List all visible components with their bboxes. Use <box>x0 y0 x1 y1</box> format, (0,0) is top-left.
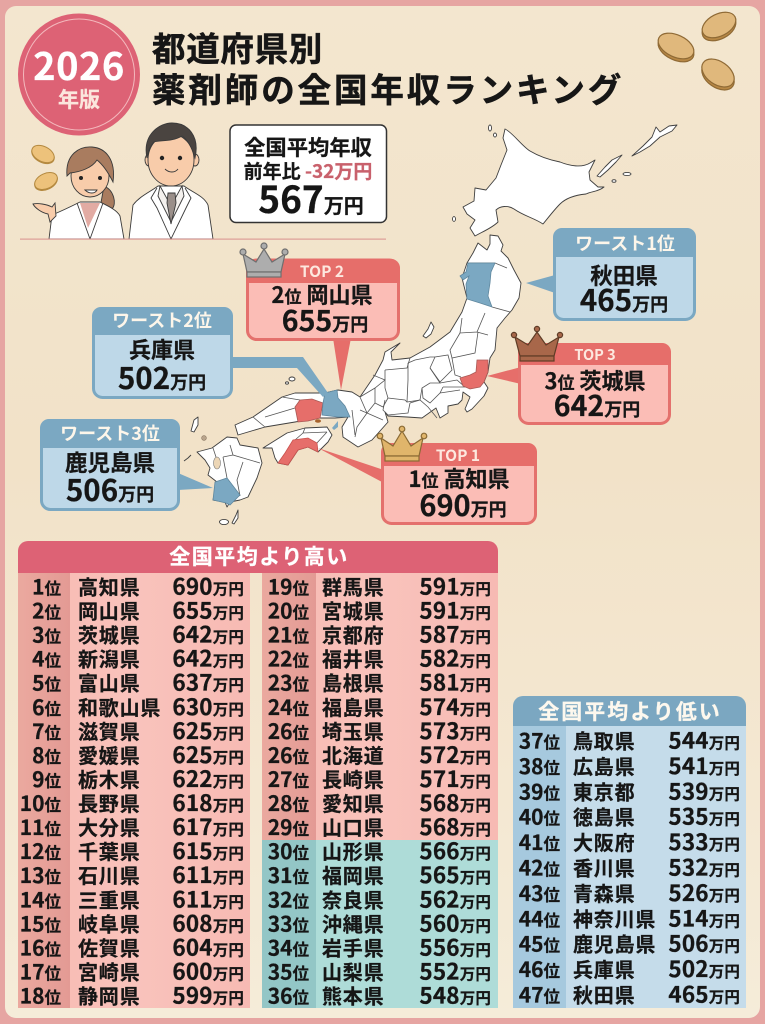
callout: TOP 1 Kochi: 1位 高知県 <box>409 462 509 494</box>
map: Shodoshima <box>315 419 321 423</box>
callout: national average: 前年比 -32万円 <box>244 157 372 184</box>
rows: ranks 1–18: 5位 <box>32 668 62 698</box>
map: Shikoku <box>263 427 332 465</box>
rows: ranks 37–47: 465万円 <box>668 978 740 1010</box>
rows: ranks 1–18: 岡山県 <box>78 596 140 625</box>
rows: ranks 37–47: 41位 <box>519 827 560 857</box>
arrow: pointer to Ibaraki <box>487 367 521 384</box>
rows: ranks 1–18: 17位 <box>20 956 62 986</box>
rows: ranks 1–18: 1位 <box>32 572 62 602</box>
panel: below national average <box>513 696 746 1010</box>
icon: bronze crown <box>511 326 563 361</box>
rows: ranks 19–36: 571万円 <box>419 762 491 794</box>
callout: TOP 1 Kochi <box>318 426 537 525</box>
rows: ranks 1–18: 富山県 <box>78 668 140 697</box>
rows: ranks 19–36: 福島県 <box>322 692 384 721</box>
map: Kochi highlighted <box>278 438 318 465</box>
rows: ranks 37–47: 526万円 <box>668 876 740 908</box>
map of Japan <box>184 125 677 525</box>
rows: ranks 19–36: 島根県 <box>322 668 384 697</box>
rows: ranks 19–36: 北海道 <box>322 740 384 769</box>
rows: ranks 1–18: 茨城県 <box>78 620 140 649</box>
map: Hyogo highlighted <box>322 390 350 417</box>
rows: ranks 37–47: 鹿児島県 <box>573 929 656 958</box>
rows: ranks 19–36: 591万円 <box>419 570 491 602</box>
arrow: pointer to Hyogo <box>231 357 328 397</box>
callout: worst 3 Kagoshima: ワースト3位 <box>60 420 160 446</box>
map: Kagoshima highlighted <box>213 478 240 505</box>
rows: ranks 1–18: 長野県 <box>78 788 140 817</box>
callout: worst 2 Hyogo <box>92 307 328 398</box>
rows: ranks 1–18: 625万円 <box>172 738 244 770</box>
rows: ranks 1–18: 和歌山県 <box>78 692 161 721</box>
rows: ranks 19–36: 山口県 <box>322 812 384 841</box>
badge: 2026年版: 年版 <box>58 84 100 114</box>
callout: TOP 1 Kochi: 690万円 <box>419 483 507 525</box>
rows: ranks 1–18: 12位 <box>20 836 62 866</box>
rows: ranks 37–47: 鳥取県 <box>573 726 635 754</box>
rows: ranks 19–36 <box>268 570 491 1010</box>
rows: ranks 19–36: 565万円 <box>419 858 491 890</box>
rows: ranks 37–47: 東京都 <box>573 776 635 805</box>
callout: worst 1 Akita: ワースト1位 <box>575 230 675 256</box>
rows: ranks 1–18: 6位 <box>32 692 62 722</box>
illustration: female pharmacist <box>33 147 124 239</box>
rows: ranks 19–36: 22位 <box>268 644 310 674</box>
rows: ranks 1–18: 16位 <box>20 932 62 962</box>
rows: ranks 19–36: 埼玉県 <box>322 716 384 745</box>
divider <box>20 239 386 240</box>
rows: ranks 1–18: 岐阜県 <box>78 908 140 937</box>
callout: worst 1 Akita <box>526 228 696 320</box>
rows: ranks 1–18: 608万円 <box>172 906 244 938</box>
rows: ranks 19–36: 山梨県 <box>322 956 384 986</box>
rows: ranks 19–36: 574万円 <box>419 690 491 722</box>
map: Ibaraki highlighted <box>460 360 488 389</box>
rows: ranks 1–18: 大分県 <box>78 812 140 841</box>
callout: worst 2 Hyogo: ワースト2位 <box>112 307 212 333</box>
icon: silver crown <box>240 243 288 277</box>
rows: ranks 19–36: 長崎県 <box>322 764 384 793</box>
rows: ranks 37–47: 兵庫県 <box>573 954 635 983</box>
rows: ranks 1–18: 10位 <box>20 788 62 818</box>
rows: ranks 1–18: 高知県 <box>78 572 140 600</box>
rows: ranks 1–18: 637万円 <box>172 666 244 698</box>
rows: ranks 19–36: 572万円 <box>419 738 491 770</box>
rows: ranks 1–18: 8位 <box>32 740 62 770</box>
rows: ranks 19–36: 552万円 <box>419 954 491 986</box>
title: 都道府県別 <box>152 22 323 71</box>
title: 薬剤師の全国年収ランキング <box>152 63 624 112</box>
rows: ranks 19–36: 19位 <box>268 572 310 602</box>
rows: ranks 19–36: 奈良県 <box>322 884 384 913</box>
rows: ranks 19–36: 573万円 <box>419 714 491 746</box>
rows: ranks 37–47: 539万円 <box>668 774 740 806</box>
rows: ranks 1–18: 630万円 <box>172 690 244 722</box>
rows: ranks 1–18: 611万円 <box>172 882 244 914</box>
rows: ranks 37–47: 40位 <box>519 802 560 832</box>
arrow: pointer to Okayama <box>333 338 351 390</box>
arrow: pointer to Kagoshima <box>178 473 213 490</box>
rows: ranks 37–47 <box>519 724 740 1010</box>
rows: ranks 19–36: 山形県 <box>322 836 384 865</box>
rows: ranks 37–47: 506万円 <box>668 927 740 959</box>
rows: ranks 37–47: 大阪府 <box>573 827 635 856</box>
rows: ranks 37–47: 47位 <box>519 980 560 1010</box>
rows: ranks 19–36: 28位 <box>268 788 310 818</box>
map: Kyushu <box>197 437 262 507</box>
rows: ranks 19–36: 566万円 <box>419 834 491 866</box>
rows: ranks 1–18: 3位 <box>32 620 62 650</box>
heading <box>18 541 498 573</box>
rows: ranks 1–18: 三重県 <box>78 884 140 913</box>
rows: ranks 1–18: 600万円 <box>172 954 244 986</box>
rows: ranks 19–36: 582万円 <box>419 642 491 674</box>
rows: ranks 19–36: 21位 <box>268 620 310 650</box>
rows: ranks 19–36: 560万円 <box>419 906 491 938</box>
rows: ranks 1–18: 15位 <box>20 908 62 938</box>
rows: ranks 1–18: 625万円 <box>172 714 244 746</box>
rows: ranks 19–36: 群馬県 <box>322 572 384 600</box>
rows: ranks 37–47: 43位 <box>519 878 560 908</box>
rows: ranks 1–18: 9位 <box>32 764 62 794</box>
rows: ranks 19–36: 556万円 <box>419 930 491 962</box>
callout: TOP 3 Ibaraki: TOP 3 <box>574 344 616 365</box>
map: Okayama highlighted <box>295 399 323 422</box>
rows: ranks 19–36: 愛知県 <box>322 788 384 817</box>
rows: ranks 19–36: 23位 <box>268 668 310 698</box>
rows: ranks 1–18: 2位 <box>32 596 62 626</box>
badge: 2026年版: 2026 <box>33 36 125 91</box>
callout: worst 3 Kagoshima: 鹿児島県 <box>65 446 155 478</box>
rows: ranks 19–36: 35位 <box>268 956 310 986</box>
rows: ranks 37–47: 神奈川県 <box>573 903 656 932</box>
rows: ranks 19–36: 562万円 <box>419 882 491 914</box>
rows: ranks 19–36: 591万円 <box>419 594 491 626</box>
rows: ranks 1–18: 栃木県 <box>78 764 140 793</box>
rows: ranks 37–47: 544万円 <box>668 724 740 756</box>
rows: ranks 19–36: 29位 <box>268 812 310 842</box>
rows: ranks 37–47: 青森県 <box>573 878 635 907</box>
icon: coins left <box>29 142 60 194</box>
rows: ranks 1–18: 石川県 <box>78 860 140 889</box>
rows: ranks 1–18: 604万円 <box>172 930 244 962</box>
rows: ranks 19–36: 27位 <box>268 764 310 794</box>
rows: ranks 19–36: 宮城県 <box>322 596 384 625</box>
map: prefecture borders <box>213 263 510 496</box>
rows: ranks 37–47: 502万円 <box>668 952 740 984</box>
rows: ranks 19–36: 福井県 <box>322 644 384 673</box>
map: small islands <box>184 322 434 525</box>
rows: ranks 19–36: 568万円 <box>419 810 491 842</box>
rows: ranks 37–47: 秋田県 <box>573 980 635 1008</box>
rows: ranks 19–36: 34位 <box>268 932 310 962</box>
callout: TOP 2 Okayama: TOP 2 <box>300 260 344 282</box>
map: Hokkaido and northern islands <box>452 125 677 236</box>
rows: ranks 1–18: 静岡県 <box>78 980 140 1010</box>
heading: 全国平均より高い <box>169 541 349 571</box>
rows: ranks 37–47: 535万円 <box>668 800 740 832</box>
rows: ranks 19–36: 32位 <box>268 884 310 914</box>
rows: ranks 37–47: 45位 <box>519 929 560 959</box>
callout: worst 3 Kagoshima: 506万円 <box>66 468 154 510</box>
map: Akita highlighted <box>460 263 495 307</box>
callout: worst 1 Akita: 465万円 <box>580 278 668 320</box>
rows: ranks 37–47: 徳島県 <box>573 802 635 831</box>
rows: ranks 37–47: 541万円 <box>668 749 740 781</box>
rows: ranks 37–47: 44位 <box>519 903 560 933</box>
rows: ranks 1–18: 7位 <box>32 716 62 746</box>
callout: TOP 2 Okayama <box>240 243 400 390</box>
arrow: pointer to Akita <box>526 275 555 293</box>
map: Oki island <box>202 436 206 440</box>
rows: ranks 1–18: 佐賀県 <box>78 932 140 961</box>
callout: national average: 567万円 <box>258 170 364 224</box>
rows: ranks 1–18 <box>20 570 244 1010</box>
rows: ranks 37–47: 42位 <box>519 852 560 882</box>
rows: ranks 1–18: 599万円 <box>172 978 244 1010</box>
rows: ranks 19–36: 30位 <box>268 836 310 866</box>
rows: ranks 37–47: 広島県 <box>573 751 635 780</box>
rows: ranks 1–18: 18位 <box>20 980 62 1010</box>
rows: ranks 19–36: 岩手県 <box>322 932 384 961</box>
rows: ranks 1–18: 滋賀県 <box>78 716 140 745</box>
rows: ranks 19–36: 568万円 <box>419 786 491 818</box>
map: Ariake sea <box>214 457 220 469</box>
illustration: male pharmacist <box>129 123 213 239</box>
rows: ranks 37–47: 38位 <box>519 751 560 781</box>
rows: ranks 1–18: 617万円 <box>172 810 244 842</box>
rows: ranks 19–36: 福岡県 <box>322 860 384 889</box>
callout: national average <box>230 125 386 224</box>
rows: ranks 1–18: 11位 <box>20 812 62 842</box>
rows: ranks 19–36: 33位 <box>268 908 310 938</box>
rows: ranks 1–18: 13位 <box>20 860 62 890</box>
rows: ranks 19–36: 26位 <box>268 740 310 770</box>
callout: TOP 3 Ibaraki: 3位 茨城県 <box>545 364 645 396</box>
arrow: pointer to Kochi <box>318 448 384 483</box>
rows: ranks 1–18: 14位 <box>20 884 62 914</box>
rows: ranks 1–18: 新潟県 <box>78 644 140 673</box>
rows: ranks 19–36: 24位 <box>268 692 310 722</box>
callout: TOP 2 Okayama: 655万円 <box>282 299 368 340</box>
rows: ranks 1–18: 655万円 <box>172 594 244 626</box>
table backgrounds <box>18 560 498 1008</box>
map: Awaji highlighted <box>332 421 338 430</box>
rows: ranks 19–36: 581万円 <box>419 666 491 698</box>
callout: national average: 全国平均年収 <box>244 131 372 162</box>
rows: ranks 37–47: 514万円 <box>668 901 740 933</box>
rows: ranks 19–36: 20位 <box>268 596 310 626</box>
rows: ranks 1–18: 622万円 <box>172 762 244 794</box>
rows: ranks 37–47: 533万円 <box>668 825 740 857</box>
rows: ranks 1–18: 611万円 <box>172 858 244 890</box>
rows: ranks 37–47: 37位 <box>519 726 560 756</box>
rows: ranks 19–36: 26位 <box>268 716 310 746</box>
panel: above national average <box>18 541 498 1010</box>
heading: 全国平均より低い <box>538 696 722 726</box>
rows: ranks 37–47: 532万円 <box>668 850 740 882</box>
rows: ranks 1–18: 宮崎県 <box>78 956 140 986</box>
rows: ranks 1–18: 4位 <box>32 644 62 674</box>
rows: ranks 1–18: 642万円 <box>172 642 244 674</box>
callout: worst 3 Kagoshima <box>40 419 213 510</box>
rows: ranks 19–36: 京都府 <box>322 620 384 649</box>
callout: worst 2 Hyogo: 兵庫県 <box>129 333 195 365</box>
rows: ranks 19–36: 587万円 <box>419 618 491 650</box>
rows: ranks 37–47: 39位 <box>519 776 560 806</box>
badge: 2026年版 <box>18 14 140 136</box>
rows: ranks 19–36: 548万円 <box>419 978 491 1010</box>
callout: TOP 3 Ibaraki: 642万円 <box>554 384 640 425</box>
rows: ranks 37–47: 香川県 <box>573 852 635 882</box>
rows: ranks 1–18: 642万円 <box>172 618 244 650</box>
rows: ranks 1–18: 千葉県 <box>78 836 140 865</box>
rows: ranks 19–36: 熊本県 <box>322 980 384 1010</box>
callout: TOP 2 Okayama: 2位 岡山県 <box>272 278 372 310</box>
callout: worst 1 Akita: 秋田県 <box>590 259 658 291</box>
rows: ranks 1–18: 615万円 <box>172 834 244 866</box>
icon: gold crown <box>377 426 427 461</box>
rows: ranks 19–36: 31位 <box>268 860 310 890</box>
rows: ranks 37–47: 46位 <box>519 954 560 984</box>
rows: ranks 1–18: 690万円 <box>172 570 244 602</box>
callout: TOP 1 Kochi: TOP 1 <box>436 444 480 466</box>
rows: ranks 19–36: 沖縄県 <box>322 908 384 937</box>
rows: ranks 1–18: 愛媛県 <box>78 740 140 769</box>
table backgrounds <box>513 715 746 1008</box>
icon: coins top right <box>654 7 740 96</box>
rows: ranks 1–18: 618万円 <box>172 786 244 818</box>
title <box>152 22 624 112</box>
callout: worst 2 Hyogo: 502万円 <box>118 356 206 398</box>
map: Honshu <box>235 235 521 447</box>
rows: ranks 19–36: 36位 <box>268 980 310 1010</box>
callout: TOP 3 Ibaraki <box>487 326 671 425</box>
